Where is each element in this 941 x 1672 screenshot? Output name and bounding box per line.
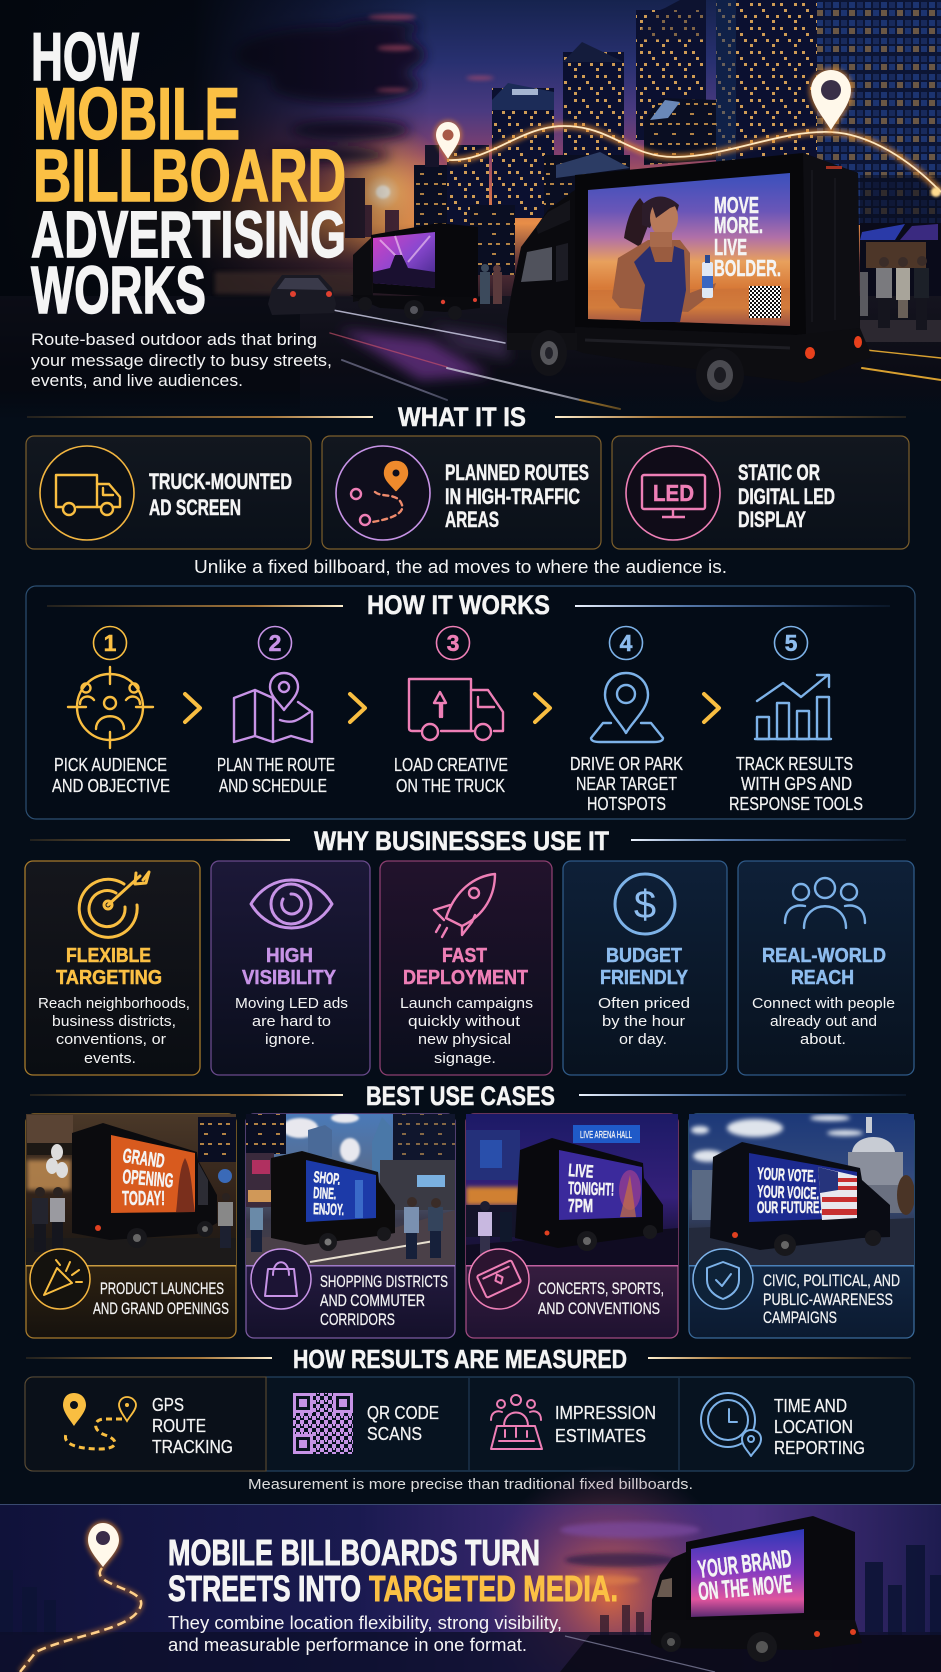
small truck [350,223,480,320]
photo: grand opening truck: OPENING [122,1166,174,1192]
panel: budget friendly [563,861,727,1075]
arrow [535,694,550,722]
pedestrians [860,256,929,330]
photo: your vote truck: YOUR VOTE. [757,1164,817,1186]
panel: measurement methods: ROUTE [152,1416,206,1436]
icon: dollar [615,874,675,934]
banner subtext: and measurable performance in one format. [168,1635,527,1655]
panel: high visibility: HIGH [266,945,313,967]
panel: fast deployment: signage. [434,1050,496,1067]
large truck with ad screen [507,153,872,402]
step 5: WITH GPS AND [741,774,852,794]
banner headline: MOBILE BILLBOARDS TURN [168,1532,540,1573]
panel: real-world reach: REACH [791,967,854,989]
panel: fast deployment: new physical [418,1031,511,1048]
step 3: ON THE TRUCK [396,776,505,796]
panel: flexible targeting: TARGETING [56,967,162,989]
panel: LED display: DIGITAL LED [738,484,835,509]
banner truck [651,1516,862,1662]
banner headline: TARGETED MEDIA. [369,1568,618,1609]
photo: live tonight truck: LIVE ARENA HALL [580,1130,632,1141]
panel: measurement methods: GPS [152,1395,184,1415]
step 4 [570,626,683,814]
step 4: HOTSPOTS [587,794,666,814]
panel: flexible targeting: business districts, [52,1013,176,1030]
panel: shopping districts: AND COMMUTER [320,1291,425,1310]
photo: live tonight truck [466,1114,678,1265]
title: BILLBOARD [33,134,346,217]
panel: civic campaigns [689,1114,915,1338]
photo: shop dine enjoy truck: DINE. [313,1185,337,1203]
photo: your vote truck [689,1114,915,1265]
title: WORKS [31,253,206,328]
banner truck: YOUR BRAND [696,1545,793,1584]
icon: route with pin [351,462,407,525]
icon: clock with pin [701,1393,761,1456]
panel: LED display [612,436,909,549]
panel: high visibility: Moving LED ads [235,995,348,1012]
panel: measurement methods: IMPRESSION [555,1403,656,1423]
photo: shop dine enjoy truck [246,1113,455,1265]
step 1: 1 [104,630,117,656]
icon: impressions [491,1395,542,1449]
large truck with ad screen: MOVE [714,192,759,218]
photo: live tonight truck: 7PM [568,1196,593,1216]
panel: high visibility: ignore. [265,1031,315,1048]
panel: truck-mounted ad screen: TRUCK-MOUNTED [149,469,292,494]
panel: measurement methods: REPORTING [774,1438,865,1458]
step 5: 5 [785,630,798,656]
photo: your vote truck: YOUR VOICE. [757,1182,819,1203]
step 3: LOAD CREATIVE [394,755,508,775]
step 4: 4 [620,630,633,656]
step 5: TRACK RESULTS [736,754,853,774]
heading: how it works: HOW IT WORKS [367,590,550,620]
panel: product launches: PRODUCT LAUNCHES [100,1279,224,1298]
arrow [350,694,365,722]
hero subtitle [31,330,332,390]
panel: flexible targeting: Reach neighborhoods, [38,995,190,1012]
icon: LED screen [642,475,705,517]
section heading: why businesses use it: WHY BUSINESSES USE IT [314,826,609,856]
arrow [185,694,200,722]
panel: flexible targeting: events. [84,1050,136,1067]
panel: planned routes [322,436,601,549]
panel: LED display: STATIC OR [738,460,820,485]
section heading: what it is: WHAT IT IS [398,402,526,432]
panel: real-world reach: REAL-WORLD [762,945,886,967]
panel: truck-mounted ad screen [26,436,311,549]
step 5: RESPONSE TOOLS [729,794,863,814]
step 5 [729,626,863,814]
panel: planned routes: IN HIGH-TRAFFIC [445,484,580,509]
panel: budget friendly: or day. [619,1031,667,1048]
panel: measurement methods: QR CODE [367,1403,439,1423]
banner truck: ON THE MOVE [697,1570,793,1606]
woman runner on screen [612,196,716,322]
panel: product launches: AND GRAND OPENINGS [93,1299,229,1318]
panel: shopping districts: CORRIDORS [320,1310,395,1329]
panel: high visibility: VISIBILITY [242,967,337,989]
panel: real-world reach: Connect with people [752,995,895,1012]
panel: measurement methods: LOCATION [774,1417,853,1437]
icon: QR code [293,1393,353,1454]
panel: flexible targeting [25,861,200,1075]
title: ADVERTISING [31,197,346,271]
hero subtitle: Route-based outdoor ads that bring [31,330,317,349]
panel: budget friendly: BUDGET [606,945,682,967]
icon: eye [251,880,332,928]
large truck with ad screen: BOLDER. [714,255,781,281]
section heading: best use cases: BEST USE CASES [366,1081,555,1111]
panel: budget friendly: Often priced [598,995,690,1012]
panel: measurement methods: TRACKING [152,1437,233,1457]
panel: high visibility: are hard to [252,1013,331,1030]
step 2: 2 [269,630,281,656]
panel: real-world reach: already out and [770,1013,877,1030]
step 1 [52,626,170,796]
panel: LED display: DISPLAY [738,507,806,532]
icon: rocket [434,874,495,937]
banner: closing message [0,1465,941,1672]
icon: LED screen: LED [653,480,694,506]
panel: fast deployment: FAST [442,945,487,967]
large truck with ad screen: LIVE [714,234,747,260]
arrow [704,694,719,722]
icon: party popper [30,1249,90,1309]
banner subtext: They combine location flexibility, strong visibility, [168,1613,562,1633]
photo: grand opening truck [26,1114,236,1265]
panel: budget friendly: by the hour [602,1013,685,1030]
photo: shop dine enjoy truck: SHOP. [313,1169,341,1189]
icon: shopping bag [251,1249,311,1309]
step 1: PICK AUDIENCE [54,755,167,775]
large truck with ad screen: MORE. [714,212,763,238]
panel: high visibility [211,861,370,1075]
panel: planned routes: PLANNED ROUTES [445,460,589,485]
caption: measurement precision: Measurement is more precise than traditional fixed billboards. [248,1476,693,1493]
hero subtitle: events, and live audiences. [31,371,243,390]
route line with pin [20,1523,141,1672]
panel: how it works [26,586,915,819]
title: MOBILE [33,74,240,155]
panel: fast deployment: DEPLOYMENT [403,967,528,989]
panel: planned routes: AREAS [445,507,499,532]
panel: shopping districts: SHOPPING DISTRICTS [320,1272,448,1291]
icon: truck [56,475,120,515]
title [31,19,346,328]
step 2: PLAN THE ROUTE [217,755,335,775]
step 3 [394,626,508,796]
panel: budget friendly: FRIENDLY [600,967,689,989]
icon: GPS route [63,1393,136,1449]
hero subtitle: your message directly to busy streets, [31,351,332,370]
panel: fast deployment: Launch campaigns [400,995,533,1012]
banner subtext [168,1613,562,1655]
panel: measurement methods: ESTIMATES [555,1426,646,1446]
panel: civic campaigns: CAMPAIGNS [763,1308,837,1327]
panel: fast deployment: quickly without [408,1013,521,1030]
panel: concerts and sports [466,1114,678,1338]
hero photo: city street with ad trucks [0,0,941,420]
panel: measurement methods [25,1377,914,1471]
photo: your vote truck: OUR FUTURE. [757,1198,822,1217]
icon: people [785,878,865,928]
step 4: DRIVE OR PARK [570,754,683,774]
panel: real-world reach: about. [800,1031,846,1048]
photo: live tonight truck: TONIGHT! [568,1178,615,1200]
route line and map pins [436,70,941,197]
panel: real-world reach [738,861,914,1075]
section heading: how results are measured: HOW RESULTS ARE MEASURED [293,1344,627,1374]
panel: flexible targeting: conventions, or [56,1031,166,1048]
icon: ticket [469,1249,529,1309]
title: HOW [31,19,140,95]
step 4: NEAR TARGET [576,774,677,794]
photo: shop dine enjoy truck: ENJOY. [313,1201,344,1219]
panel: product launches [26,1114,236,1338]
banner headline: STREETS INTO [168,1568,361,1609]
icon: dollar: $ [634,883,656,927]
step 3: 3 [447,630,459,656]
icon: target [79,872,149,937]
step 2: AND SCHEDULE [219,776,327,796]
panel: measurement methods: TIME AND [774,1396,847,1416]
photo: grand opening truck: TODAY! [122,1188,165,1210]
caption: unlike a fixed billboard: Unlike a fixed billboard, the ad moves to where the audience is. [194,557,727,577]
step 2 [217,626,335,796]
step 1: AND OBJECTIVE [52,776,170,796]
panel: truck-mounted ad screen: AD SCREEN [149,495,241,520]
panel: shopping districts [246,1113,455,1338]
panel: concerts and sports: CONCERTS, SPORTS, [538,1279,664,1298]
panel: flexible targeting: FLEXIBLE [66,945,151,967]
panel: concerts and sports: AND CONVENTIONS [538,1299,660,1318]
icon: shield check [693,1249,753,1309]
panel: civic campaigns: PUBLIC-AWARENESS [763,1290,893,1309]
photo: live tonight truck: LIVE [568,1160,594,1182]
photo: grand opening truck: GRAND [121,1145,166,1173]
panel: measurement methods: SCANS [367,1424,422,1444]
panel: fast deployment [380,861,552,1075]
car [268,275,336,315]
banner headline [168,1532,618,1609]
